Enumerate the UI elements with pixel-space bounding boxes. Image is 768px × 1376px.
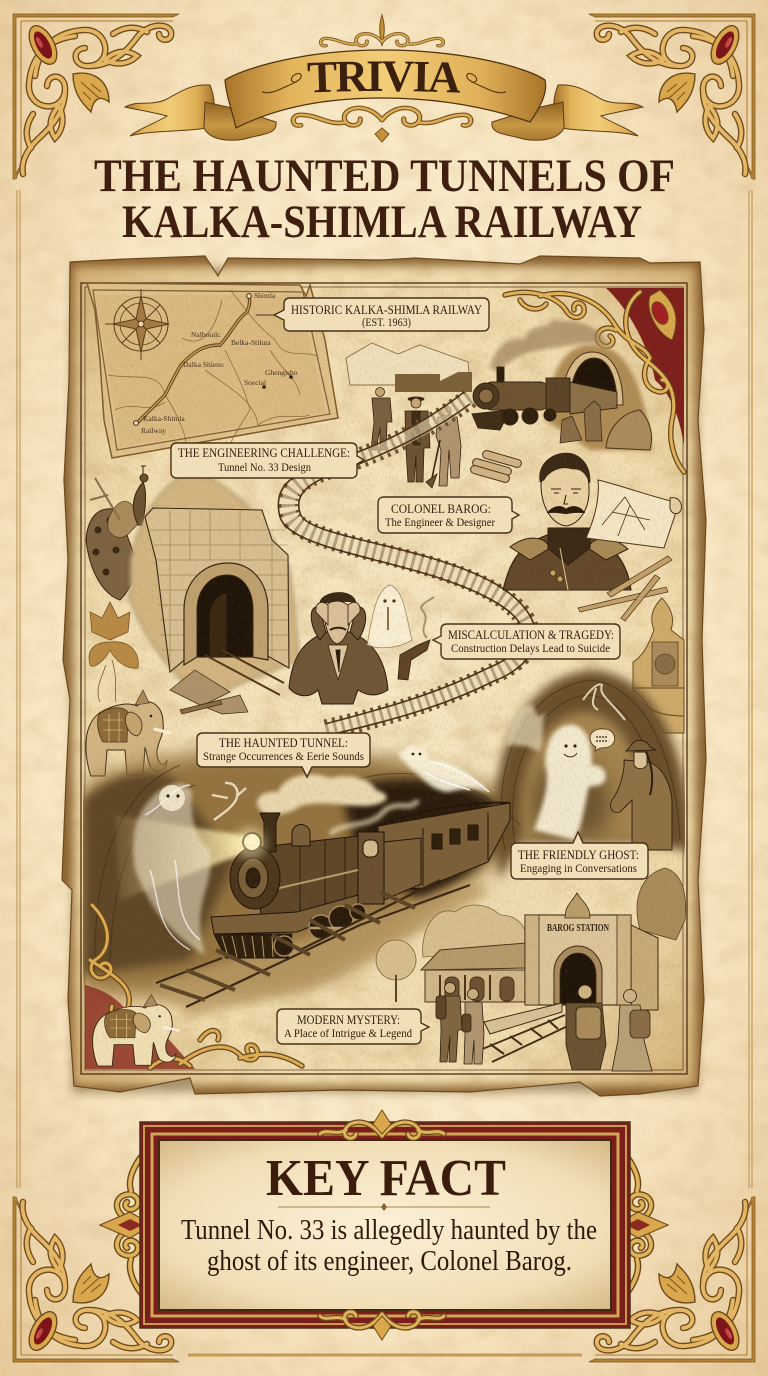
tourist A (436, 982, 462, 1062)
map place names: Shimla (254, 291, 276, 300)
callout: haunted tunnel: THE HAUNTED TUNNEL: (219, 735, 348, 750)
ribbon left tail (125, 85, 214, 136)
brick facade (145, 508, 289, 672)
boiler (260, 836, 358, 914)
ribbon scrolls beside label (262, 74, 506, 93)
inner frame (81, 283, 687, 1074)
distant train (395, 372, 472, 392)
ribbon folds (204, 102, 564, 140)
wisp ghost (212, 783, 246, 820)
faint ghost (505, 705, 546, 752)
headlight beam (115, 815, 248, 900)
wheels (274, 904, 366, 956)
hills (346, 343, 470, 385)
parchment shadow (72, 268, 698, 1092)
callout: friendly ghost: THE FRIENDLY GHOST: (518, 847, 639, 862)
flying ghost (399, 746, 489, 792)
train carriages (378, 803, 510, 890)
map rivers (108, 290, 318, 450)
cab (358, 832, 384, 904)
callout: historic railway: HISTORIC KALKA-SHIMLA RAILWAY (291, 302, 483, 317)
ornate elephant (93, 995, 178, 1066)
callout: friendly ghost: Engaging in Conversations (520, 861, 637, 875)
key fact frame bottom ornament (320, 1312, 444, 1340)
arch (184, 563, 268, 665)
callout: friendly ghost (511, 832, 648, 879)
tunnel depth (340, 779, 512, 900)
workers (371, 388, 461, 488)
tourist D (612, 990, 652, 1071)
face details (551, 489, 581, 504)
trivia label: TRIVIA (307, 61, 460, 93)
tender (384, 838, 421, 900)
key fact side ornaments (100, 1157, 668, 1293)
map place names: Belka-Stiluta (231, 338, 271, 347)
locomotive smoke (257, 774, 387, 815)
map place names: Kalka-Shimla (143, 414, 185, 423)
corner ornament: parchment bottom left (85, 905, 302, 1069)
winding railway track (278, 392, 536, 736)
main title: THE HAUNTED TUNNELS OF (94, 150, 675, 202)
headlight glow (234, 827, 266, 859)
callout: modern mystery: A Place of Intrigue & Legend (284, 1026, 412, 1040)
rock tunnel mouth (545, 345, 652, 450)
back trees (423, 905, 527, 957)
small ghost (367, 585, 412, 648)
worker left (371, 388, 392, 450)
panel: parchment illustration (60, 250, 710, 1100)
key fact panel (100, 1110, 668, 1340)
key fact divider (278, 1203, 490, 1211)
woman traveller (610, 740, 672, 850)
revolver and smoke (398, 597, 434, 680)
blueprint scroll and pencils (578, 480, 681, 621)
map railway route (134, 294, 293, 425)
headlight (243, 833, 261, 851)
chimney (260, 813, 280, 852)
callout: engineering challenge: Tunnel No. 33 Design (218, 460, 311, 474)
wisp ghost right (583, 684, 625, 720)
colonel barog portrait (503, 453, 631, 590)
tunnel dark wash left (83, 750, 530, 996)
ribbon banner (124, 14, 644, 143)
map place names: Nalbouilc (191, 330, 221, 339)
compass rose (105, 289, 169, 360)
key fact parchment (159, 1140, 611, 1310)
callout: engineering challenge: THE ENGINEERING CHALLENGE: (178, 445, 350, 460)
map place names: Railway (141, 426, 166, 435)
corner ornament: parchment top right (505, 288, 684, 472)
logs (470, 450, 522, 483)
floral motif (89, 602, 138, 702)
callout: miscalculation and tragedy: MISCALCULATION & TRAGEDY: (448, 627, 614, 642)
callout: miscalculation and tragedy: Construction Delays Lead to Suicide (451, 641, 610, 655)
moustache (547, 506, 585, 514)
callout: miscalculation and tragedy (433, 624, 620, 659)
worker with hat (405, 397, 430, 482)
callout: colonel barog: The Engineer & Designer (385, 515, 495, 529)
corner ornament: top right (589, 14, 755, 179)
hair (540, 453, 590, 483)
main title (94, 150, 675, 248)
cliff (130, 470, 300, 700)
key fact text: Tunnel No. 33 is allegedly haunted by the (181, 1214, 597, 1246)
elephant decoration (86, 690, 169, 776)
lower scene foliage and platform (376, 868, 686, 1071)
worker with shovel (426, 406, 461, 488)
key fact frame top ornament (320, 1110, 444, 1138)
callout: historic railway: (EST. 1963) (362, 315, 411, 329)
lower ground fade (346, 858, 510, 979)
temple carving (633, 598, 684, 733)
key fact text (181, 1214, 597, 1277)
tourist B (462, 988, 484, 1064)
big locomotive (211, 813, 421, 958)
ribbon flourish below (293, 108, 471, 142)
friendly ghost (534, 725, 606, 840)
peacock (86, 466, 148, 600)
cowcatcher (214, 934, 292, 958)
station platform and rails (480, 1003, 572, 1062)
dome (292, 824, 310, 846)
corner ornament: bottom left (13, 1197, 179, 1362)
rocks (606, 410, 652, 450)
callout: engineering challenge (171, 443, 364, 478)
map place names: Dalka Shieno (183, 360, 224, 369)
callout: modern mystery (277, 1009, 429, 1044)
ghost in headlight beam (133, 784, 211, 955)
engineering scene: hills, distant train, locomotive, tunnel (346, 320, 652, 488)
speech bubble (590, 729, 615, 751)
stone ring lines (95, 680, 680, 965)
callout: colonel barog (378, 497, 519, 533)
locomotive (472, 367, 617, 430)
callout: historic railway (274, 298, 489, 331)
platform shed (421, 943, 526, 1002)
sketch texture overlay (83, 285, 685, 1072)
haunted tunnel scene (83, 670, 690, 1015)
smokebox (230, 847, 280, 909)
callout: haunted tunnel: Strange Occurrences & Eerie Sounds (203, 749, 364, 763)
key fact text: ghost of its engineer, Colonel Barog. (207, 1245, 572, 1277)
right tunnel (494, 670, 690, 880)
stone tunnel portal (130, 470, 300, 714)
station sign: BAROG STATION (547, 923, 610, 934)
map place names: Ghengisho (265, 368, 298, 377)
callout: haunted tunnel (197, 733, 370, 777)
track into tunnel (205, 650, 284, 695)
head (541, 458, 589, 526)
key fact frame (140, 1122, 630, 1328)
uniform (503, 535, 631, 590)
tourist C (566, 985, 606, 1070)
workers near tunnel (560, 401, 602, 443)
tunnel wall shading (83, 773, 235, 975)
smoke plume (490, 320, 610, 372)
map place names: Soecial (244, 378, 266, 387)
key fact heading: KEY FACT (266, 1150, 506, 1207)
barog station facade (525, 893, 658, 1010)
main title: KALKA-SHIMLA RAILWAY (122, 196, 642, 248)
map panel (87, 283, 338, 458)
man in despair (289, 592, 388, 704)
map place names (141, 291, 298, 435)
footplate (211, 895, 358, 934)
ribbon right tail (554, 85, 643, 136)
ribbon main band (225, 50, 546, 128)
callout: colonel barog: COLONEL BAROG: (391, 501, 491, 516)
rubble (170, 670, 248, 714)
callout: modern mystery: MODERN MYSTERY: (297, 1012, 400, 1027)
tourists (436, 982, 652, 1071)
tree (376, 940, 416, 1002)
corner ornament: top left (13, 14, 179, 179)
corner ornament: bottom right (589, 1197, 755, 1362)
ground under rails (150, 880, 490, 1015)
ribbon flourish above (321, 15, 443, 46)
big track (156, 880, 470, 1007)
